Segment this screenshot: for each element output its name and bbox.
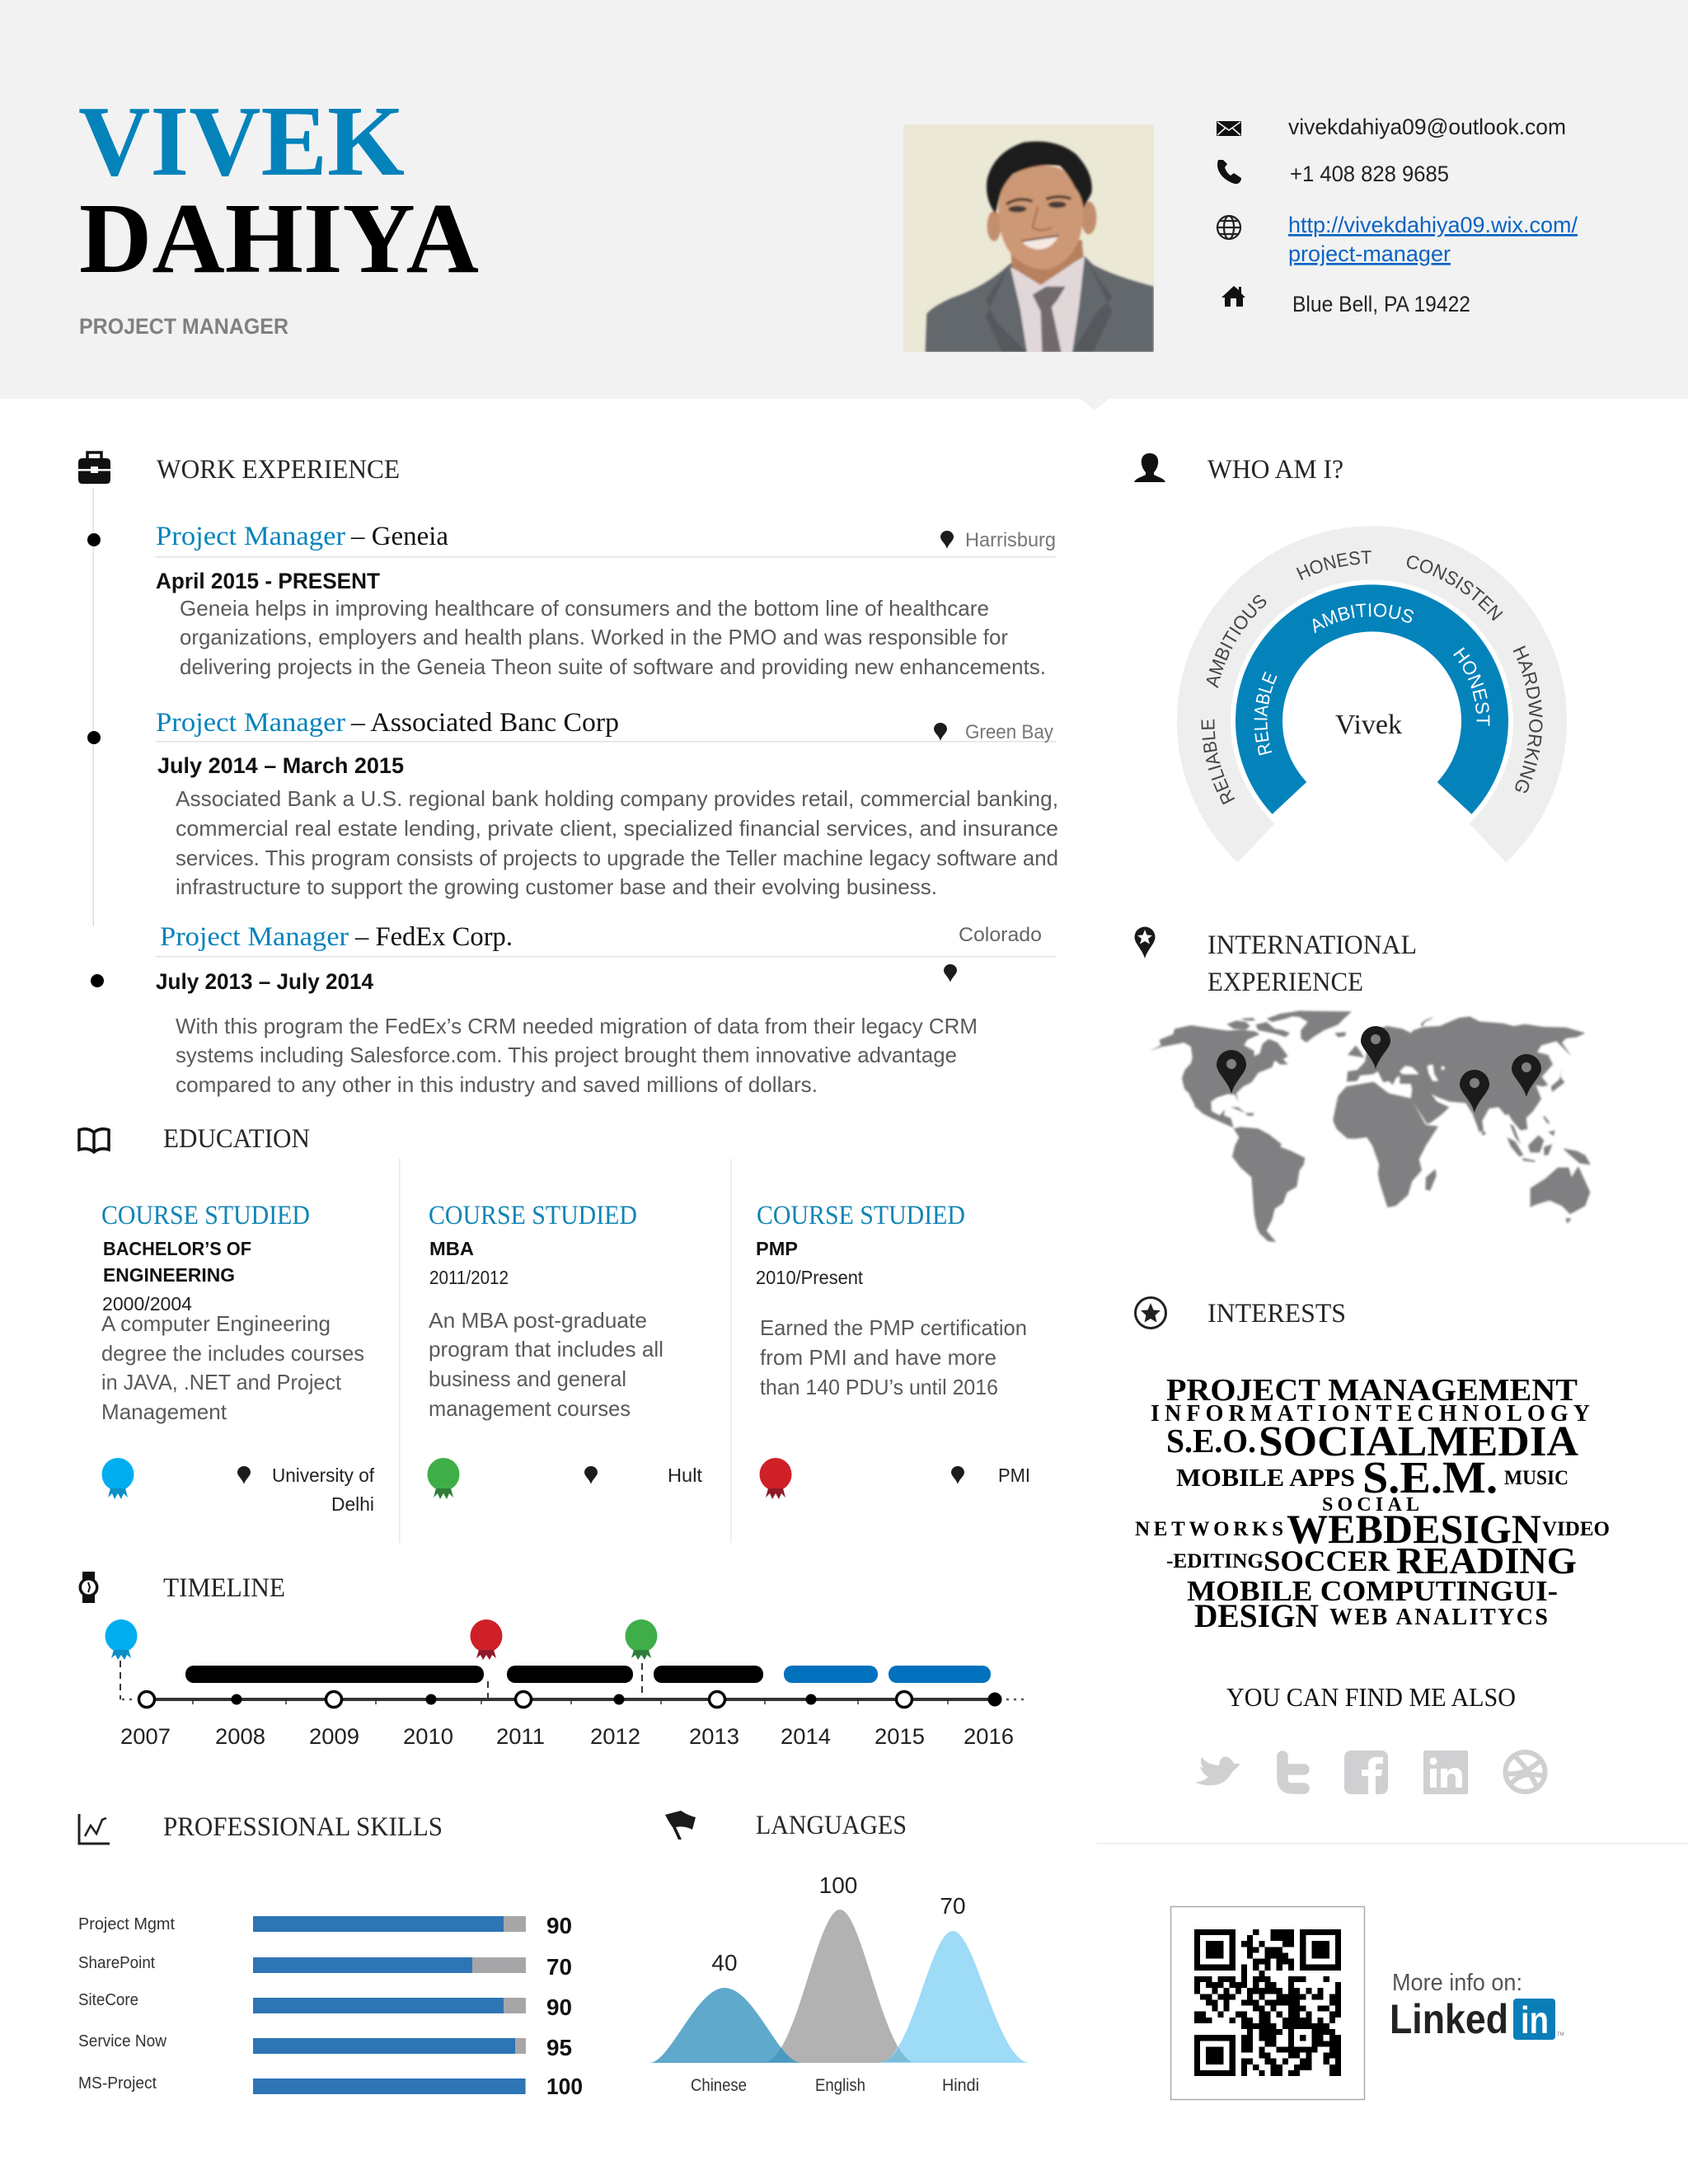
job 1 — [156, 522, 1056, 679]
languages panel — [649, 1811, 1030, 2095]
job 3: Project Manager — [160, 922, 349, 952]
year labels — [120, 1724, 1014, 1749]
heading: international experience — [1207, 930, 1417, 997]
linkedin callout: in — [1521, 1999, 1549, 2041]
language bell chart — [649, 1872, 1030, 2095]
job 2: services. This program consists of projects to upgrade the Teller machine legacy software and — [176, 846, 1058, 870]
language bell chart: Chinese — [691, 2076, 747, 2095]
icon: dribbble — [1505, 1752, 1545, 1792]
icon: envelope — [1217, 121, 1241, 136]
word cloud: S.E.O. — [1166, 1422, 1256, 1460]
course column 2: 2011/2012 — [429, 1267, 509, 1288]
icon: book — [79, 1129, 109, 1152]
icon: house — [1221, 286, 1245, 307]
axis with year markers — [122, 1691, 1024, 1708]
icon: linkedin — [1423, 1750, 1468, 1794]
vertical timeline — [87, 488, 104, 987]
website link: http://vivekdahiya09.wix.com/ — [1288, 213, 1578, 237]
outer labels: AMBITIOUS — [1207, 595, 1266, 689]
timeline panel — [79, 1572, 1024, 1749]
language bell chart: 70 — [940, 1893, 966, 1919]
website link: project-manager — [1288, 241, 1451, 266]
word cloud: PROJECT MANAGEMENT — [1166, 1373, 1578, 1408]
course column 3: Earned the PMP certification — [760, 1315, 1027, 1340]
portrait photo — [903, 124, 1154, 353]
course column 3 — [756, 1201, 1030, 1499]
name and role — [78, 86, 479, 339]
radial diagram — [1177, 526, 1567, 862]
outer labels: HARDWORKING — [1513, 645, 1543, 793]
linkedin callout: More info on: — [1392, 1970, 1522, 1996]
course column 1: ENGINEERING — [103, 1264, 235, 1286]
name and role: PROJECT MANAGER — [79, 314, 288, 339]
skill labels: SharePoint — [78, 1954, 155, 1972]
year labels: 2010 — [403, 1724, 453, 1749]
year labels: 2009 — [309, 1724, 359, 1749]
icon: line chart — [79, 1814, 110, 1844]
word cloud: MUSIC — [1504, 1467, 1568, 1489]
contact: icons and details — [1217, 115, 1578, 316]
period bars — [185, 1666, 991, 1683]
heading: you can find me also: YOU CAN FIND ME ALSO — [1226, 1682, 1516, 1712]
skill labels: Service Now — [78, 2032, 167, 2050]
course column 1: degree the includes courses — [101, 1341, 364, 1366]
language bell chart: 100 — [819, 1872, 857, 1898]
dashed connectors — [120, 1661, 642, 1703]
word cloud: WEB ANALITYCS — [1329, 1605, 1548, 1630]
skill labels: SiteCore — [78, 1991, 138, 2009]
course column 2: MBA — [429, 1238, 474, 1259]
job 3: With this program the FedEx’s CRM needed migration of data from their legacy CRM — [176, 1014, 978, 1038]
centre label: Vivek — [1335, 710, 1402, 740]
course column 2: management courses — [429, 1396, 631, 1421]
icon: phone — [1217, 160, 1241, 184]
americas and greenland — [1150, 1010, 1352, 1242]
job 1: Harrisburg — [965, 529, 1056, 551]
job 1: Geneia helps in improving healthcare of consumers and the bottom line of healthcare — [180, 596, 989, 621]
language bell chart: English — [815, 2076, 865, 2095]
course column 2: An MBA post-graduate — [429, 1308, 647, 1333]
year labels: 2016 — [964, 1724, 1014, 1749]
year labels: 2015 — [874, 1724, 925, 1749]
phone: +1 408 828 9685 — [1290, 162, 1449, 186]
word cloud: WEBDESIGN — [1287, 1506, 1541, 1552]
outer labels: CONSISTEN — [1406, 555, 1503, 621]
icon: facebook — [1344, 1750, 1388, 1794]
word cloud: SOCIAL — [1322, 1494, 1419, 1516]
outer labels — [1202, 551, 1543, 804]
year labels: 2008 — [215, 1724, 265, 1749]
icon: person — [1134, 453, 1165, 482]
skill bars — [253, 1916, 526, 2094]
name and role: VIVEK — [78, 86, 405, 197]
course column 1: A computer Engineering — [101, 1311, 331, 1336]
icon: twitter — [1195, 1756, 1240, 1785]
job 2: July 2014 – March 2015 — [157, 753, 404, 778]
skill values: 90 — [546, 1994, 572, 2020]
course column 3: from PMI and have more — [760, 1345, 996, 1370]
job 2: commercial real estate lending, private client, specialized financial services, and insurance — [176, 816, 1058, 841]
social links panel — [1195, 1682, 1545, 1794]
job 3: systems including Salesforce.com. This project brought them innovative advantage — [176, 1043, 957, 1067]
course column 1: Management — [101, 1399, 227, 1424]
word cloud: VIDEO — [1542, 1518, 1610, 1540]
course column 2: Hult — [668, 1465, 703, 1486]
course column 3: 2010/Present — [756, 1267, 864, 1288]
heading: international experience: EXPERIENCE — [1207, 968, 1363, 997]
column dividers — [399, 1159, 732, 1543]
linkedin callout: TM — [1557, 2032, 1564, 2037]
job 2: Green Bay — [965, 721, 1053, 743]
word cloud: INFORMATIONTECHNOLOGY — [1151, 1401, 1590, 1427]
skill values: 95 — [546, 2035, 572, 2060]
word cloud: SOCCER — [1264, 1544, 1390, 1577]
word cloud: SOCIALMEDIA — [1259, 1418, 1578, 1465]
icon: flag — [665, 1811, 696, 1840]
job 2: Associated Bank a U.S. regional bank holding company provides retail, commercial banking, — [176, 786, 1058, 811]
icon: watch — [79, 1572, 99, 1603]
course column 3: COURSE STUDIED — [757, 1201, 965, 1230]
course column 1: in JAVA, .NET and Project — [101, 1370, 342, 1394]
job 2: Project Manager — [156, 708, 345, 738]
international experience panel — [1134, 926, 1591, 1242]
job 3: July 2013 – July 2014 — [156, 969, 373, 994]
heading: languages: LANGUAGES — [756, 1811, 907, 1840]
heading: work experience: WORK EXPERIENCE — [157, 455, 400, 485]
course column 3: PMI — [998, 1465, 1030, 1486]
course column 1: Delhi — [331, 1493, 374, 1515]
word cloud: DESIGN — [1194, 1597, 1319, 1634]
word cloud: -EDITING — [1166, 1550, 1264, 1572]
job 3: Colorado — [959, 924, 1042, 946]
job 2: – Associated Banc Corp — [350, 708, 619, 738]
linkedin callout — [1390, 1970, 1564, 2042]
email: vivekdahiya09@outlook.com — [1288, 115, 1566, 139]
course column 1: 2000/2004 — [102, 1293, 192, 1315]
course column 1 — [101, 1201, 375, 1515]
job 3: – FedEx Corp. — [354, 922, 513, 952]
word cloud: NETWORKS — [1135, 1518, 1283, 1540]
address: Blue Bell, PA 19422 — [1292, 292, 1470, 316]
skill labels — [78, 1915, 175, 2093]
job 2: infrastructure to support the growing customer base and their evolving business. — [176, 874, 937, 899]
medals — [106, 1619, 658, 1660]
world map — [1150, 1010, 1591, 1242]
job 1: delivering projects in the Geneia Theon suite of software and providing new enhancements. — [180, 654, 1046, 679]
language bell chart: Hindi — [942, 2076, 979, 2095]
who am i panel — [1134, 453, 1567, 862]
job 2 — [156, 708, 1058, 899]
heading: who am i: WHO AM I? — [1207, 455, 1343, 485]
professional skills panel — [78, 1812, 583, 2099]
skill values: 90 — [546, 1913, 572, 1938]
course column 2: business and general — [429, 1366, 626, 1391]
job 1: – Geneia — [350, 522, 448, 551]
work experience panel — [78, 452, 1058, 1097]
qr code card — [1170, 1907, 1365, 2100]
skill values: 70 — [546, 1954, 572, 1980]
language bell chart: 40 — [711, 1950, 738, 1975]
job 1: organizations, employers and health plans. Worked in the PMO and was responsible for — [180, 625, 1008, 649]
eurasia, africa and oceania — [1333, 1016, 1591, 1224]
job 3 — [156, 922, 1056, 1097]
website link — [1288, 213, 1578, 266]
heading: education: EDUCATION — [163, 1124, 310, 1154]
name and role: DAHIYA — [79, 183, 479, 294]
course column 2 — [427, 1201, 703, 1499]
word cloud: MOBILE COMPUTINGUI- — [1187, 1575, 1558, 1607]
header band — [0, 0, 1688, 410]
outer labels: RELIABLE — [1202, 719, 1235, 804]
skill labels: Project Mgmt — [78, 1915, 175, 1933]
course column 1: University of — [272, 1465, 375, 1486]
word cloud: S.E.M. — [1362, 1452, 1498, 1502]
skill values: 100 — [546, 2074, 583, 2099]
year labels: 2014 — [781, 1724, 831, 1749]
job 1: April 2015 - PRESENT — [156, 569, 380, 593]
word cloud: READING — [1396, 1540, 1577, 1582]
inner labels: AMBITIOUS — [1312, 603, 1414, 633]
icon: briefcase — [78, 452, 110, 484]
heading: international experience: INTERNATIONAL — [1207, 930, 1417, 960]
interests panel — [1135, 1297, 1610, 1634]
icon: globe — [1217, 216, 1240, 239]
year labels: 2012 — [590, 1724, 640, 1749]
skill values — [546, 1913, 583, 2099]
course column 3: PMP — [756, 1238, 798, 1259]
year labels: 2007 — [120, 1724, 171, 1749]
education panel — [79, 1124, 1030, 1543]
word cloud — [1135, 1373, 1610, 1634]
inner labels — [1254, 603, 1490, 756]
job 1: Project Manager — [156, 522, 345, 551]
heading: professional skills: PROFESSIONAL SKILLS — [163, 1812, 443, 1842]
inner labels: RELIABLE — [1254, 671, 1278, 756]
course column 1: BACHELOR’S OF — [103, 1238, 251, 1259]
outer labels: HONEST — [1296, 551, 1372, 580]
course column 3: than 140 PDU’s until 2016 — [760, 1375, 998, 1399]
skill labels: MS-Project — [78, 2074, 157, 2093]
linkedin callout: Linked — [1390, 1996, 1508, 2042]
icon: star badge — [1136, 1297, 1165, 1329]
course column 2: COURSE STUDIED — [429, 1201, 637, 1230]
word cloud: MOBILE APPS — [1176, 1463, 1355, 1492]
heading: interests: INTERESTS — [1207, 1299, 1346, 1329]
course column 1: COURSE STUDIED — [101, 1201, 310, 1230]
qr code — [1194, 1933, 1341, 2073]
year labels: 2011 — [496, 1724, 545, 1749]
map pins — [1217, 1026, 1541, 1113]
icon: star pin — [1134, 926, 1156, 958]
divider line — [1096, 1843, 1688, 1844]
job 3: compared to any other in this industry and saved millions of dollars. — [176, 1072, 818, 1097]
year labels: 2013 — [689, 1724, 739, 1749]
course column 2: program that includes all — [429, 1337, 663, 1361]
icon: tumblr — [1282, 1756, 1304, 1788]
heading: timeline: TIMELINE — [163, 1573, 285, 1603]
inner labels: HONEST — [1453, 647, 1490, 726]
